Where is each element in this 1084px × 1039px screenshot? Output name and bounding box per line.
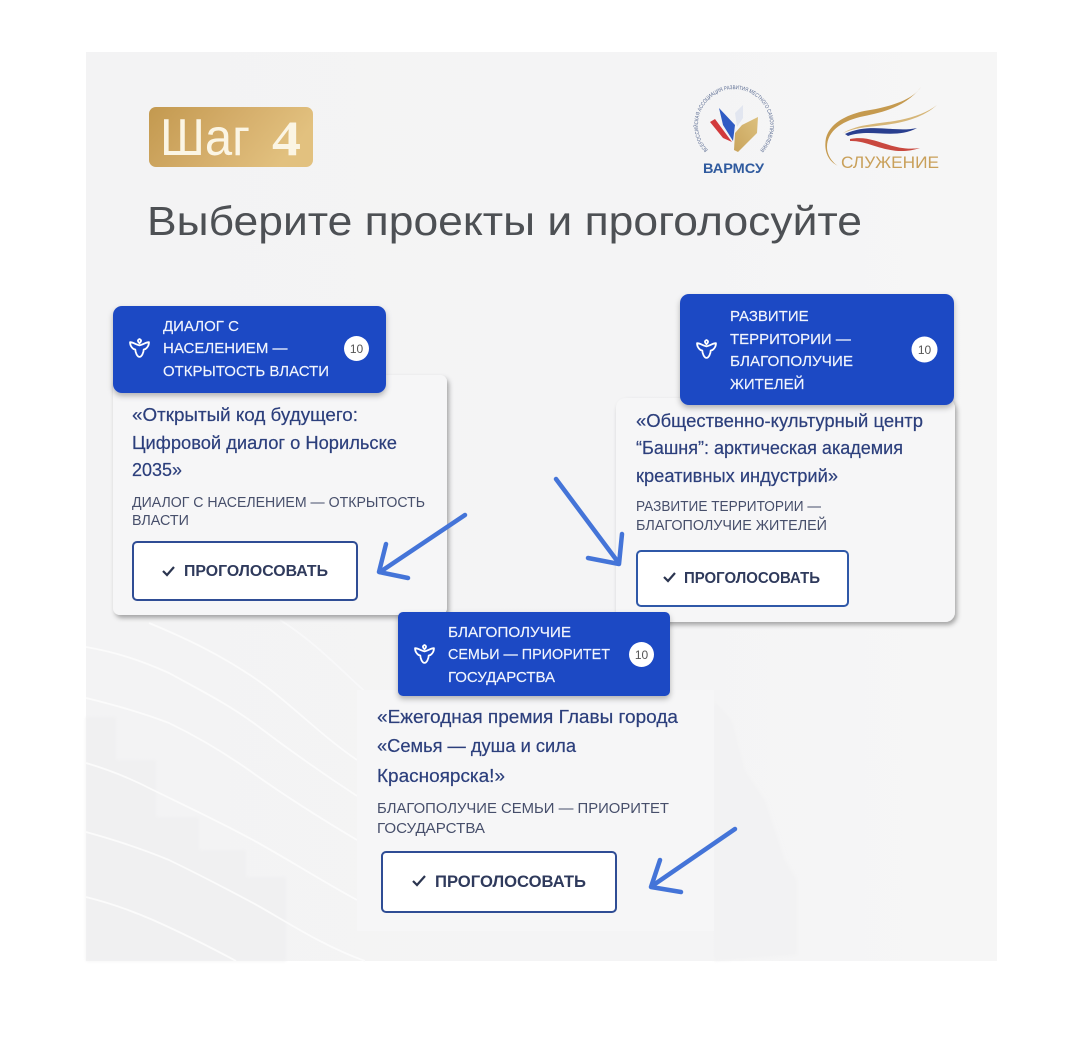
step badge: Шаг xyxy=(160,109,250,167)
card 3 header: БЛАГОПОЛУЧИЕ xyxy=(448,624,571,641)
card 1 category xyxy=(132,495,425,529)
card 2 header: ТЕРРИТОРИИ — xyxy=(730,331,851,348)
step badge: 4 xyxy=(272,110,301,166)
card 3 header: 10 xyxy=(635,648,648,662)
background panel xyxy=(86,52,997,961)
card 3 project title: «Ежегодная премия Главы города xyxy=(377,707,679,727)
card 3 category: БЛАГОПОЛУЧИЕ СЕМЬИ — ПРИОРИТЕТ xyxy=(377,801,669,817)
logo: Служение: СЛУЖЕНИЕ xyxy=(841,153,939,172)
card 1 category: ДИАЛОГ С НАСЕЛЕНИЕМ — ОТКРЫТОСТЬ xyxy=(132,495,425,511)
arrow: to card 1 button xyxy=(379,515,465,578)
card 2 header xyxy=(680,294,954,405)
card 2 vote button: ПРОГОЛОСОВАТЬ xyxy=(684,570,820,587)
card 2 header: ЖИТЕЛЕЙ xyxy=(730,375,804,393)
card 2 category: РАЗВИТИЕ ТЕРРИТОРИИ — xyxy=(636,499,821,515)
card 3 header: СЕМЬИ — ПРИОРИТЕТ xyxy=(448,646,610,663)
card 1 header: 10 xyxy=(350,342,363,356)
arrow: to card 2 button xyxy=(556,479,622,564)
card 3: Семья xyxy=(357,612,714,931)
card 2 project title: креативных индустрий» xyxy=(636,466,838,486)
card 1 header xyxy=(113,306,386,393)
card 3 vote button xyxy=(382,852,616,912)
card 2: Башня xyxy=(616,294,955,622)
card 1 category: ВЛАСТИ xyxy=(132,513,189,529)
card 2 project title: “Башня”: арктическая академия xyxy=(636,438,903,458)
card 2 body xyxy=(616,398,955,622)
logo: Служение xyxy=(825,87,939,172)
step badge xyxy=(149,107,313,167)
card 1: Открытый код будущего xyxy=(113,306,447,615)
card 2 header: 10 xyxy=(918,343,931,357)
card 1 header: ДИАЛОГ С xyxy=(163,318,239,335)
card 1 body xyxy=(113,375,447,615)
card 3 category xyxy=(377,801,669,837)
card 3 category: ГОСУДАРСТВА xyxy=(377,821,485,837)
card 2 category xyxy=(636,499,827,534)
card 1 vote button: ПРОГОЛОСОВАТЬ xyxy=(184,563,328,580)
logo: ВАРМСУ: ВСЕРОССИЙСКАЯ АССОЦИАЦИЯ РАЗВИТИЯ МЕСТНОГО САМОУПРАВЛЕНИЯ xyxy=(693,85,774,152)
card 2 header: БЛАГОПОЛУЧИЕ xyxy=(730,353,853,370)
title: Выберите проекты и проголосуйте xyxy=(147,198,862,244)
card 3 vote button: ПРОГОЛОСОВАТЬ xyxy=(435,873,586,891)
card 1 vote button xyxy=(133,542,357,600)
card 1 project title xyxy=(132,405,397,480)
card 3 project title: Красноярска!» xyxy=(377,766,505,786)
card 1 project title: Цифровой диалог о Норильске xyxy=(132,433,397,453)
card 2 project title: «Общественно-культурный центр xyxy=(636,411,923,431)
card 2 header: РАЗВИТИЕ xyxy=(730,308,809,325)
logo: ВАРМСУ: ВАРМСУ xyxy=(703,161,765,176)
card 1 project title: «Открытый код будущего: xyxy=(132,405,358,425)
arrow: to card 3 button xyxy=(651,829,735,892)
card 3 header: ГОСУДАРСТВА xyxy=(448,669,555,686)
card 2 project title xyxy=(636,411,923,486)
card 3 project title xyxy=(377,707,679,786)
card 3 header xyxy=(398,612,670,696)
card 2 category: БЛАГОПОЛУЧИЕ ЖИТЕЛЕЙ xyxy=(636,516,827,534)
card 3 project title: «Семья — душа и сила xyxy=(377,736,577,756)
card 2 vote button xyxy=(637,551,848,606)
card 1 project title: 2035» xyxy=(132,460,182,480)
card 1 header: НАСЕЛЕНИЕМ — xyxy=(163,340,287,357)
card 3 body xyxy=(357,690,714,931)
card 1 header: ОТКРЫТОСТЬ ВЛАСТИ xyxy=(163,363,329,380)
